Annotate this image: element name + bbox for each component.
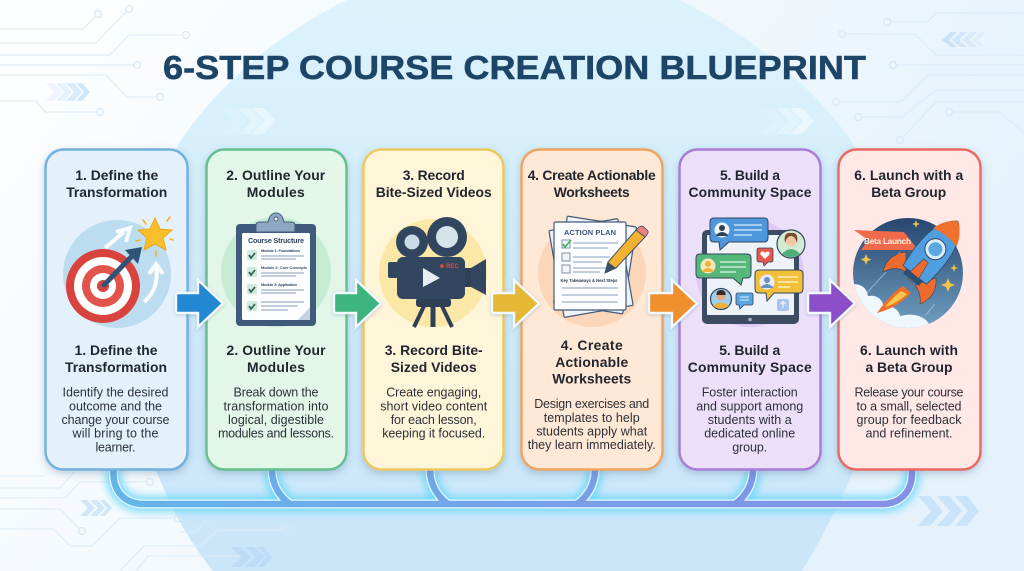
chevrons: bottom centre left xyxy=(231,547,272,567)
heading: step 2 lower: 2. Outline Your xyxy=(226,342,326,358)
text: step 4 description: templates to help xyxy=(544,411,640,425)
heading: step 3 lower: 3. Record Bite- xyxy=(385,342,483,358)
heading: step 1 top: Transformation xyxy=(66,184,167,200)
panel: step 1 define the transformation xyxy=(46,150,188,470)
arrow: step 4 to 5 xyxy=(649,280,697,327)
text: step 2 description: modules and lessons. xyxy=(218,427,334,441)
title: 6-STEP COURSE CREATION BLUEPRINT xyxy=(163,50,867,87)
chevrons: upper centre right xyxy=(760,108,814,134)
background circle xyxy=(128,0,893,571)
heading: step 3 lower: Sized Videos xyxy=(391,359,477,375)
text: step 3 description: Create engaging, xyxy=(386,386,481,400)
heading: step 1 lower: Transformation xyxy=(65,359,167,375)
icon: video camera: REC xyxy=(446,264,459,270)
text: step 5 description: dedicated online xyxy=(704,427,795,441)
circuit lines: top left xyxy=(0,6,190,116)
heading: step 4 lower xyxy=(552,337,631,386)
chevrons: top left xyxy=(46,83,90,101)
arrow: step 2 to 3 xyxy=(334,280,381,327)
panel: step 6 launch with a beta group xyxy=(838,150,980,470)
heading: step 4 lower: Worksheets xyxy=(552,370,631,386)
text: step 2 description: logical, digestible xyxy=(228,413,324,427)
heading: step 1 lower xyxy=(65,342,167,375)
heading: step 3 top xyxy=(376,167,492,200)
heading: step 3 lower xyxy=(385,342,483,375)
text: step 3 description: short video content xyxy=(380,399,488,413)
text: step 1 description: will bring to the xyxy=(72,427,159,441)
heading: step 6 top: Beta Group xyxy=(871,184,946,200)
text: step 1 description: Identify the desired xyxy=(62,386,169,400)
heading: step 2 lower: Modules xyxy=(247,359,305,375)
icon: rocket launch xyxy=(853,218,963,328)
heading: step 5 top: 5. Build a xyxy=(720,167,780,183)
arrow: step 1 to 2 xyxy=(176,280,223,327)
heading: step 1 top xyxy=(66,167,167,200)
heading: step 3 top: 3. Record xyxy=(403,167,465,183)
heading: step 2 top xyxy=(226,167,326,200)
text: step 6 description: and refinement. xyxy=(866,427,952,441)
panel: step 3 record bite-sized videos xyxy=(364,150,504,470)
heading: step 5 lower: Community Space xyxy=(688,359,812,375)
icon: target with arrow and star xyxy=(63,217,173,328)
heading: step 6 top: 6. Launch with a xyxy=(854,167,963,183)
text: step 1 description: outcome and the xyxy=(69,399,162,413)
heading: step 4 lower: Actionable xyxy=(555,354,628,370)
chevrons: upper centre left xyxy=(222,108,276,134)
text: step 3 description: for each lesson, xyxy=(391,413,477,427)
heading: step 5 lower: 5. Build a xyxy=(719,342,780,358)
heading: step 1 top: 1. Define the xyxy=(75,167,158,183)
panel: step 4 create actionable worksheets xyxy=(522,150,662,470)
text: step 2 description: transformation into xyxy=(224,399,329,413)
heading: step 4 top: Worksheets xyxy=(554,184,630,200)
connector bus under the cards xyxy=(114,470,912,504)
icon: video camera xyxy=(379,217,487,327)
text: step 5 description: group. xyxy=(732,440,767,454)
heading: step 5 lower xyxy=(688,342,812,375)
text: step 6 description: group for feedback xyxy=(856,413,962,427)
panel: step 2 outline your modules xyxy=(206,150,346,470)
text: step 6 description: to a small, selected xyxy=(856,399,962,413)
text: step 1 description: change your course xyxy=(62,413,170,427)
text: step 4 description: students apply what xyxy=(536,424,648,438)
heading: step 4 top: 4. Create Actionable xyxy=(528,167,656,183)
icon: clipboard course structure: Module 3: Application xyxy=(261,282,298,287)
text: step 5 description: and support among xyxy=(696,399,803,413)
text: step 4 description xyxy=(528,397,656,452)
text: step 1 description xyxy=(62,386,170,454)
icon: action plan worksheets with pencil: Key Takeaways & Next Steps xyxy=(560,278,618,283)
chevrons: bottom left xyxy=(80,500,112,516)
text: step 4 description: they learn immediately. xyxy=(528,438,656,452)
text: step 2 description xyxy=(218,386,334,441)
icon: clipboard course structure: Course Structure xyxy=(248,236,304,245)
icon: clipboard course structure: Module 2: Core Concepts xyxy=(261,265,307,270)
heading: step 3 top: Bite-Sized Videos xyxy=(376,184,492,200)
text: step 4 description: Design exercises and xyxy=(534,397,649,411)
chevrons: top right xyxy=(942,32,986,47)
arrow: step 3 to 4 xyxy=(492,280,539,327)
arrow: step 5 to 6 xyxy=(808,280,855,327)
icon: action plan worksheets with pencil: ACTION PLAN xyxy=(564,228,616,237)
text: step 5 description: students with a xyxy=(708,413,792,427)
icon: clipboard course structure xyxy=(221,213,331,327)
icon: action plan worksheets with pencil xyxy=(538,216,648,327)
text: step 3 description xyxy=(380,386,488,441)
heading: step 6 lower xyxy=(860,342,958,375)
panel: step 5 build a community space xyxy=(680,150,820,470)
circuit lines: bottom left xyxy=(0,472,290,571)
text: step 2 description: Break down the xyxy=(234,386,319,400)
heading: step 1 lower: 1. Define the xyxy=(74,342,158,358)
heading: step 4 top xyxy=(528,167,656,200)
heading: step 5 top: Community Space xyxy=(688,184,812,200)
heading: step 4 lower: 4. Create xyxy=(561,337,623,353)
heading: step 5 top xyxy=(688,167,812,200)
heading: step 6 lower: 6. Launch with xyxy=(860,342,958,358)
heading: step 2 lower xyxy=(226,342,326,375)
icon: tablet with chat bubbles xyxy=(696,218,805,327)
heading: step 2 top: Modules xyxy=(247,184,305,200)
heading: step 6 top xyxy=(854,167,963,200)
circuit lines: top right xyxy=(832,13,1024,144)
heading: step 2 top: 2. Outline Your xyxy=(226,167,326,183)
icon: rocket launch: Beta Launch xyxy=(864,237,911,246)
text: step 5 description xyxy=(696,386,803,454)
text: step 5 description: Foster interaction xyxy=(702,386,798,400)
heading: step 6 lower: a Beta Group xyxy=(866,359,952,375)
text: step 3 description: keeping it focused. xyxy=(382,427,485,441)
icon: clipboard course structure: Module 1: Foundations xyxy=(261,248,300,253)
text: step 6 description: Release your course xyxy=(854,386,964,400)
text: step 6 description xyxy=(854,386,964,441)
text: step 1 description: learner. xyxy=(96,440,136,454)
chevrons: bottom right xyxy=(918,496,979,526)
